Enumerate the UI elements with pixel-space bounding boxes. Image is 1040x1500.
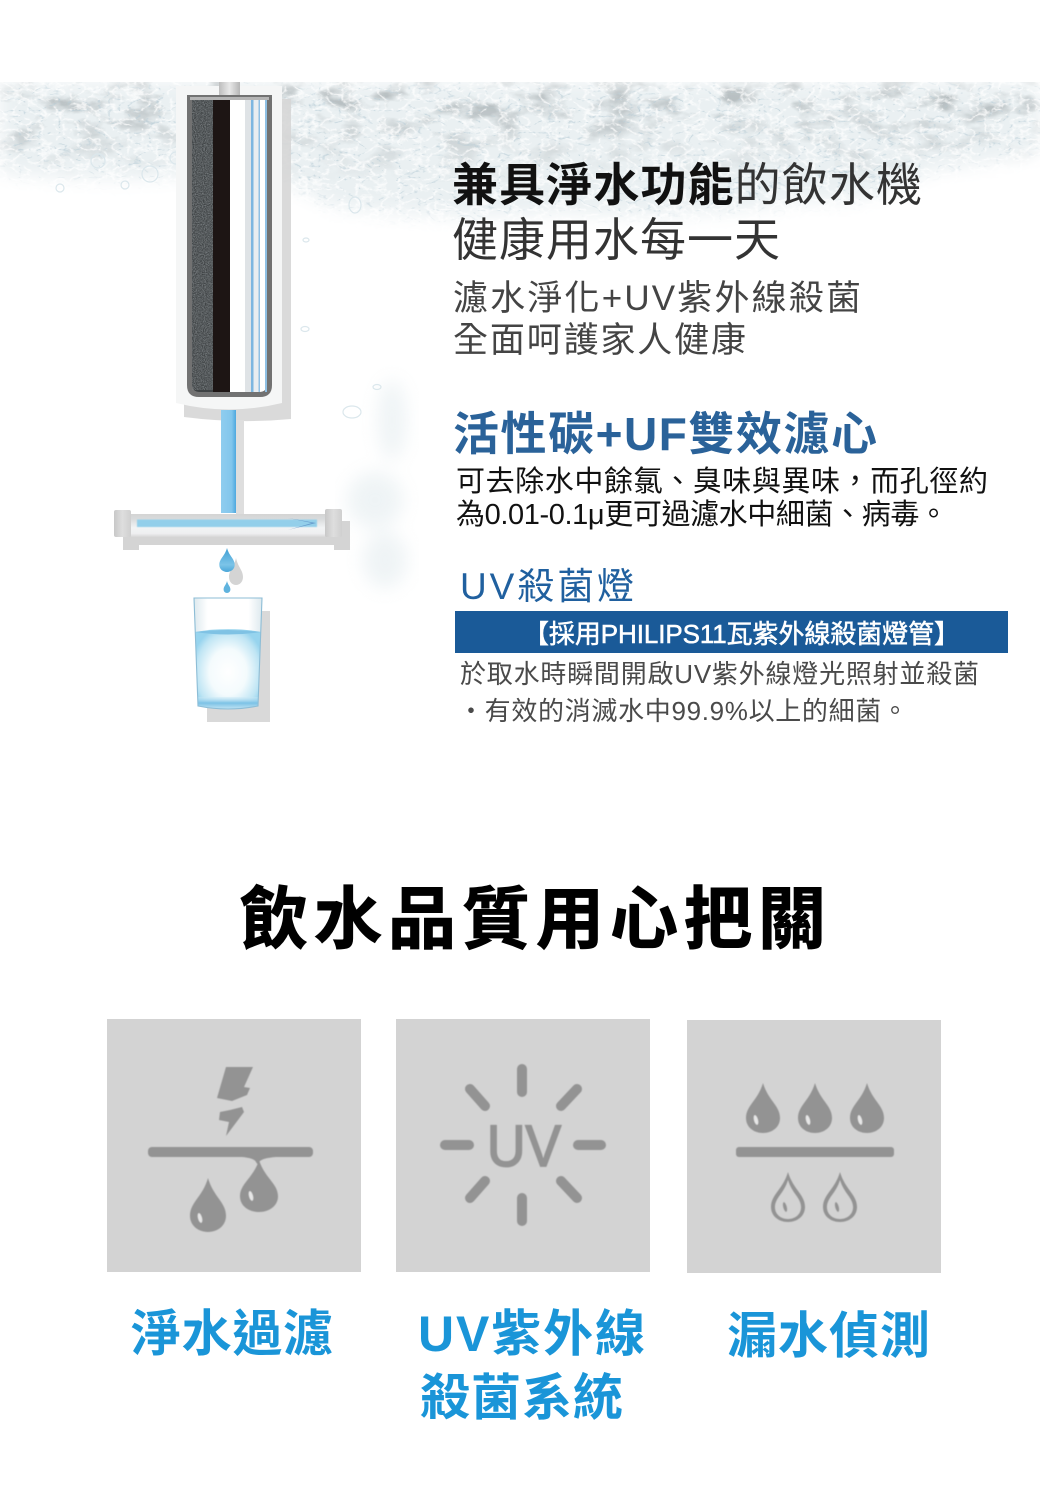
section heading: UV殺菌燈	[460, 566, 634, 607]
filter housing	[176, 86, 282, 410]
feature card: leak detection	[687, 1020, 941, 1364]
headline line 1: 兼具淨水功能的飲水機	[452, 159, 922, 211]
section: UV sterilizing lamp	[455, 566, 1008, 726]
intro headline	[452, 159, 922, 360]
feature card: water filtration	[107, 1019, 361, 1362]
water splash background	[0, 82, 1040, 610]
headline line 2: 健康用水每一天	[452, 214, 780, 266]
section heading: 活性碳+UF雙效濾心	[453, 408, 877, 460]
section body line 2: 為0.01-0.1μ更可過濾水中細菌、病毒。	[456, 498, 948, 531]
filter housing shadow	[184, 99, 291, 421]
blue banner	[455, 611, 1008, 653]
section body line 2: ・有效的消滅水中99.9%以上的細菌。	[458, 696, 908, 726]
water drops	[219, 548, 243, 593]
card label: 淨水過濾	[131, 1306, 333, 1362]
feature card: UV sterilization	[396, 1019, 650, 1426]
filter cartridge	[187, 95, 272, 397]
card label: 漏水偵測	[727, 1308, 930, 1364]
subheadline line 2: 全面呵護家人健康	[453, 321, 746, 360]
card label: UV紫外線	[418, 1306, 645, 1362]
top inlet pipe	[219, 82, 240, 96]
icon: drops above and below line	[736, 1083, 894, 1222]
main section title: 飲水品質用心把關	[240, 882, 826, 958]
icon: filter membrane with drops	[148, 1067, 313, 1232]
card background	[687, 1020, 941, 1273]
section: activated carbon and UF filter	[453, 408, 988, 531]
section body line 1: 可去除水中餘氯、臭味與異味，而孔徑約	[456, 465, 988, 498]
vertical water pipe	[221, 410, 236, 513]
card background	[396, 1019, 650, 1272]
card background	[107, 1019, 361, 1272]
icon: UV sun rays: UV	[487, 1114, 561, 1179]
glass of water	[194, 598, 270, 722]
section body line 1: 於取水時瞬間開啟UV紫外線燈光照射並殺菌	[460, 659, 979, 689]
UV lamp tube	[114, 509, 342, 537]
card label: 殺菌系統	[420, 1370, 623, 1426]
illustration: water filter system	[114, 82, 350, 722]
vertical water pipe shadow	[236, 420, 244, 514]
UV lamp tube shadow	[123, 521, 350, 550]
banner text: 【採用PHILIPS11瓦紫外線殺菌燈管】	[523, 619, 960, 649]
card label	[418, 1306, 645, 1426]
icon: UV sun rays	[445, 1069, 601, 1221]
subheadline line 1: 濾水淨化+UV紫外線殺菌	[453, 279, 861, 318]
